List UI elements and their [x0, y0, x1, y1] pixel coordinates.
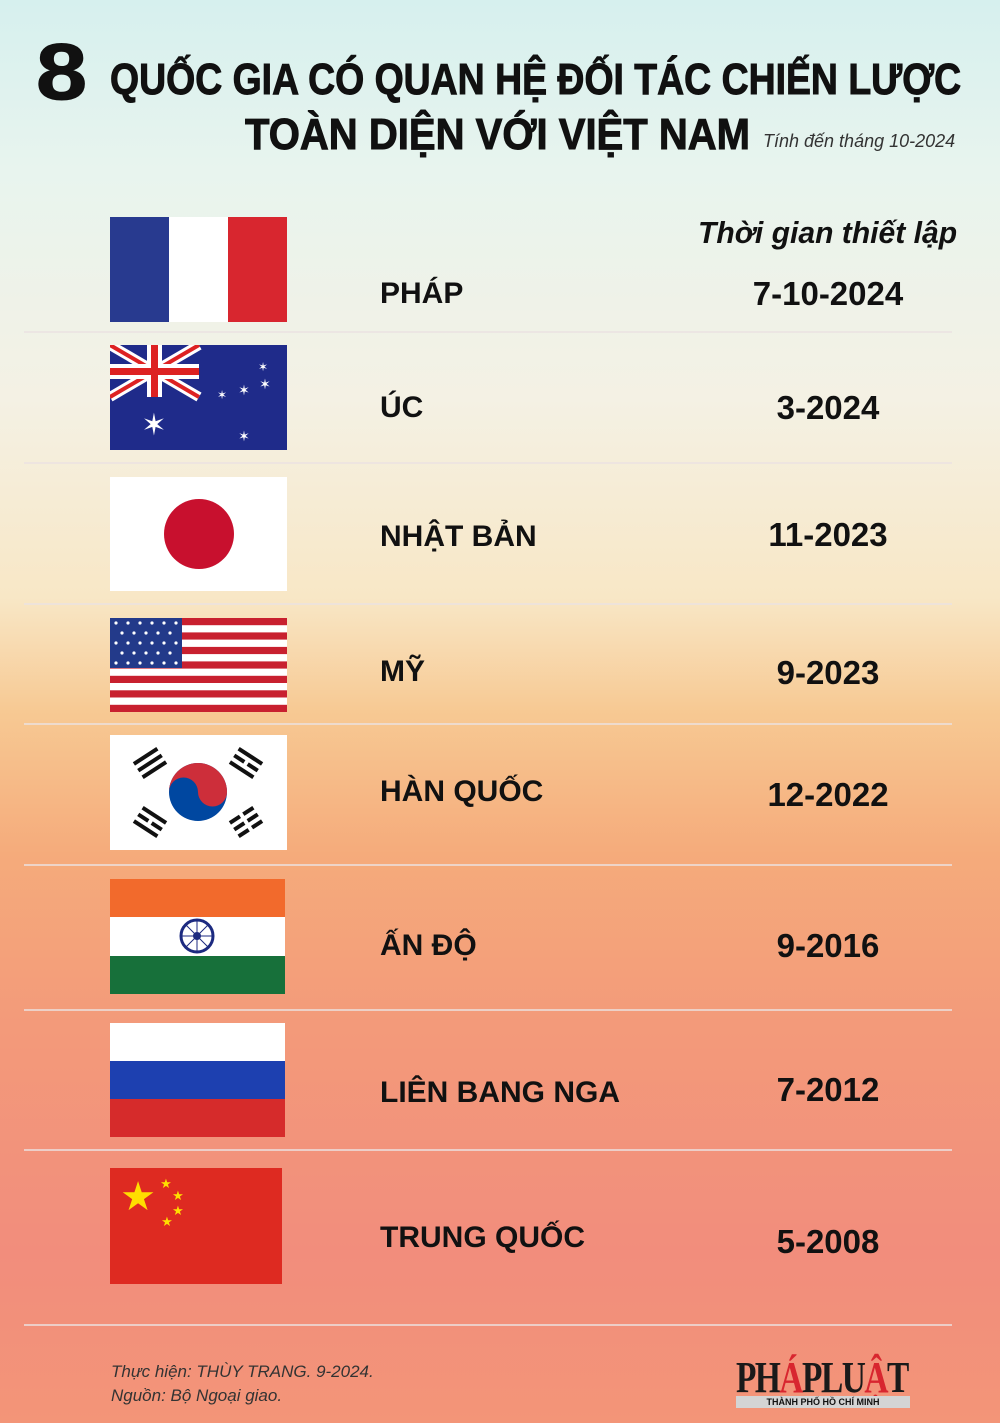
subtitle date: Tính đến tháng 10-2024	[763, 131, 955, 151]
footer credits: Thực hiện: THÙY TRANG. 9-2024.	[111, 1362, 374, 1381]
flag: Australia: ✶	[238, 428, 250, 444]
date: India: 9-2016	[777, 927, 879, 964]
row: Russia: LIÊN BANG NGA	[380, 1076, 620, 1109]
date: Russia: 7-2012	[777, 1071, 879, 1108]
flag: Australia: ✶	[217, 388, 227, 402]
flag: Australia: ✶	[238, 382, 250, 398]
flag: China: ★	[160, 1176, 172, 1191]
flag: China: ★	[172, 1188, 184, 1203]
flag: South Korea	[110, 735, 287, 850]
date: USA: 9-2023	[777, 654, 879, 691]
title number 8: 8	[36, 27, 87, 116]
flag: Australia: ✶	[258, 360, 268, 374]
logo: Pháp Luật: PHÁPLUẬT	[736, 1353, 908, 1402]
date: South Korea: 12-2022	[767, 776, 889, 813]
flag: China: ★	[120, 1175, 156, 1219]
flag: China	[110, 1168, 282, 1284]
title	[36, 27, 961, 159]
flag: Australia: ✶	[141, 409, 167, 442]
title line 2: TOÀN DIỆN VỚI VIỆT NAM	[245, 110, 750, 159]
row: Japan: NHẬT BẢN	[380, 520, 537, 553]
date: Australia: 3-2024	[777, 389, 879, 426]
footer credits: Nguồn: Bộ Ngoại giao.	[111, 1386, 282, 1405]
title line 1: QUỐC GIA CÓ QUAN HỆ ĐỐI TÁC CHIẾN LƯỢC	[110, 55, 961, 104]
flag: USA	[110, 618, 287, 712]
date: Japan: 11-2023	[768, 516, 888, 553]
row: India: ẤN ĐỘ	[380, 929, 477, 962]
row: France: PHÁP	[380, 277, 463, 310]
date: China: 5-2008	[777, 1223, 879, 1260]
row: Australia: ÚC	[380, 391, 423, 424]
row: South Korea: HÀN QUỐC	[380, 775, 543, 808]
date: France: 7-10-2024	[753, 275, 903, 312]
flag: Russia	[110, 1023, 285, 1137]
flag: Japan	[110, 477, 287, 591]
footer credits	[111, 1362, 374, 1405]
flag: Australia	[110, 345, 287, 450]
flag: India	[110, 879, 285, 994]
flag: China: ★	[172, 1203, 184, 1218]
flag: France	[110, 217, 287, 322]
row: USA: MỸ	[380, 655, 425, 688]
row: China: TRUNG QUỐC	[380, 1221, 585, 1254]
flag: China: ★	[161, 1214, 173, 1229]
flag: Australia: ✶	[259, 376, 271, 392]
logo: Pháp Luật: THÀNH PHỐ HỒ CHÍ MINH	[766, 1397, 880, 1407]
column header: Thời gian thiết lập	[698, 215, 957, 250]
